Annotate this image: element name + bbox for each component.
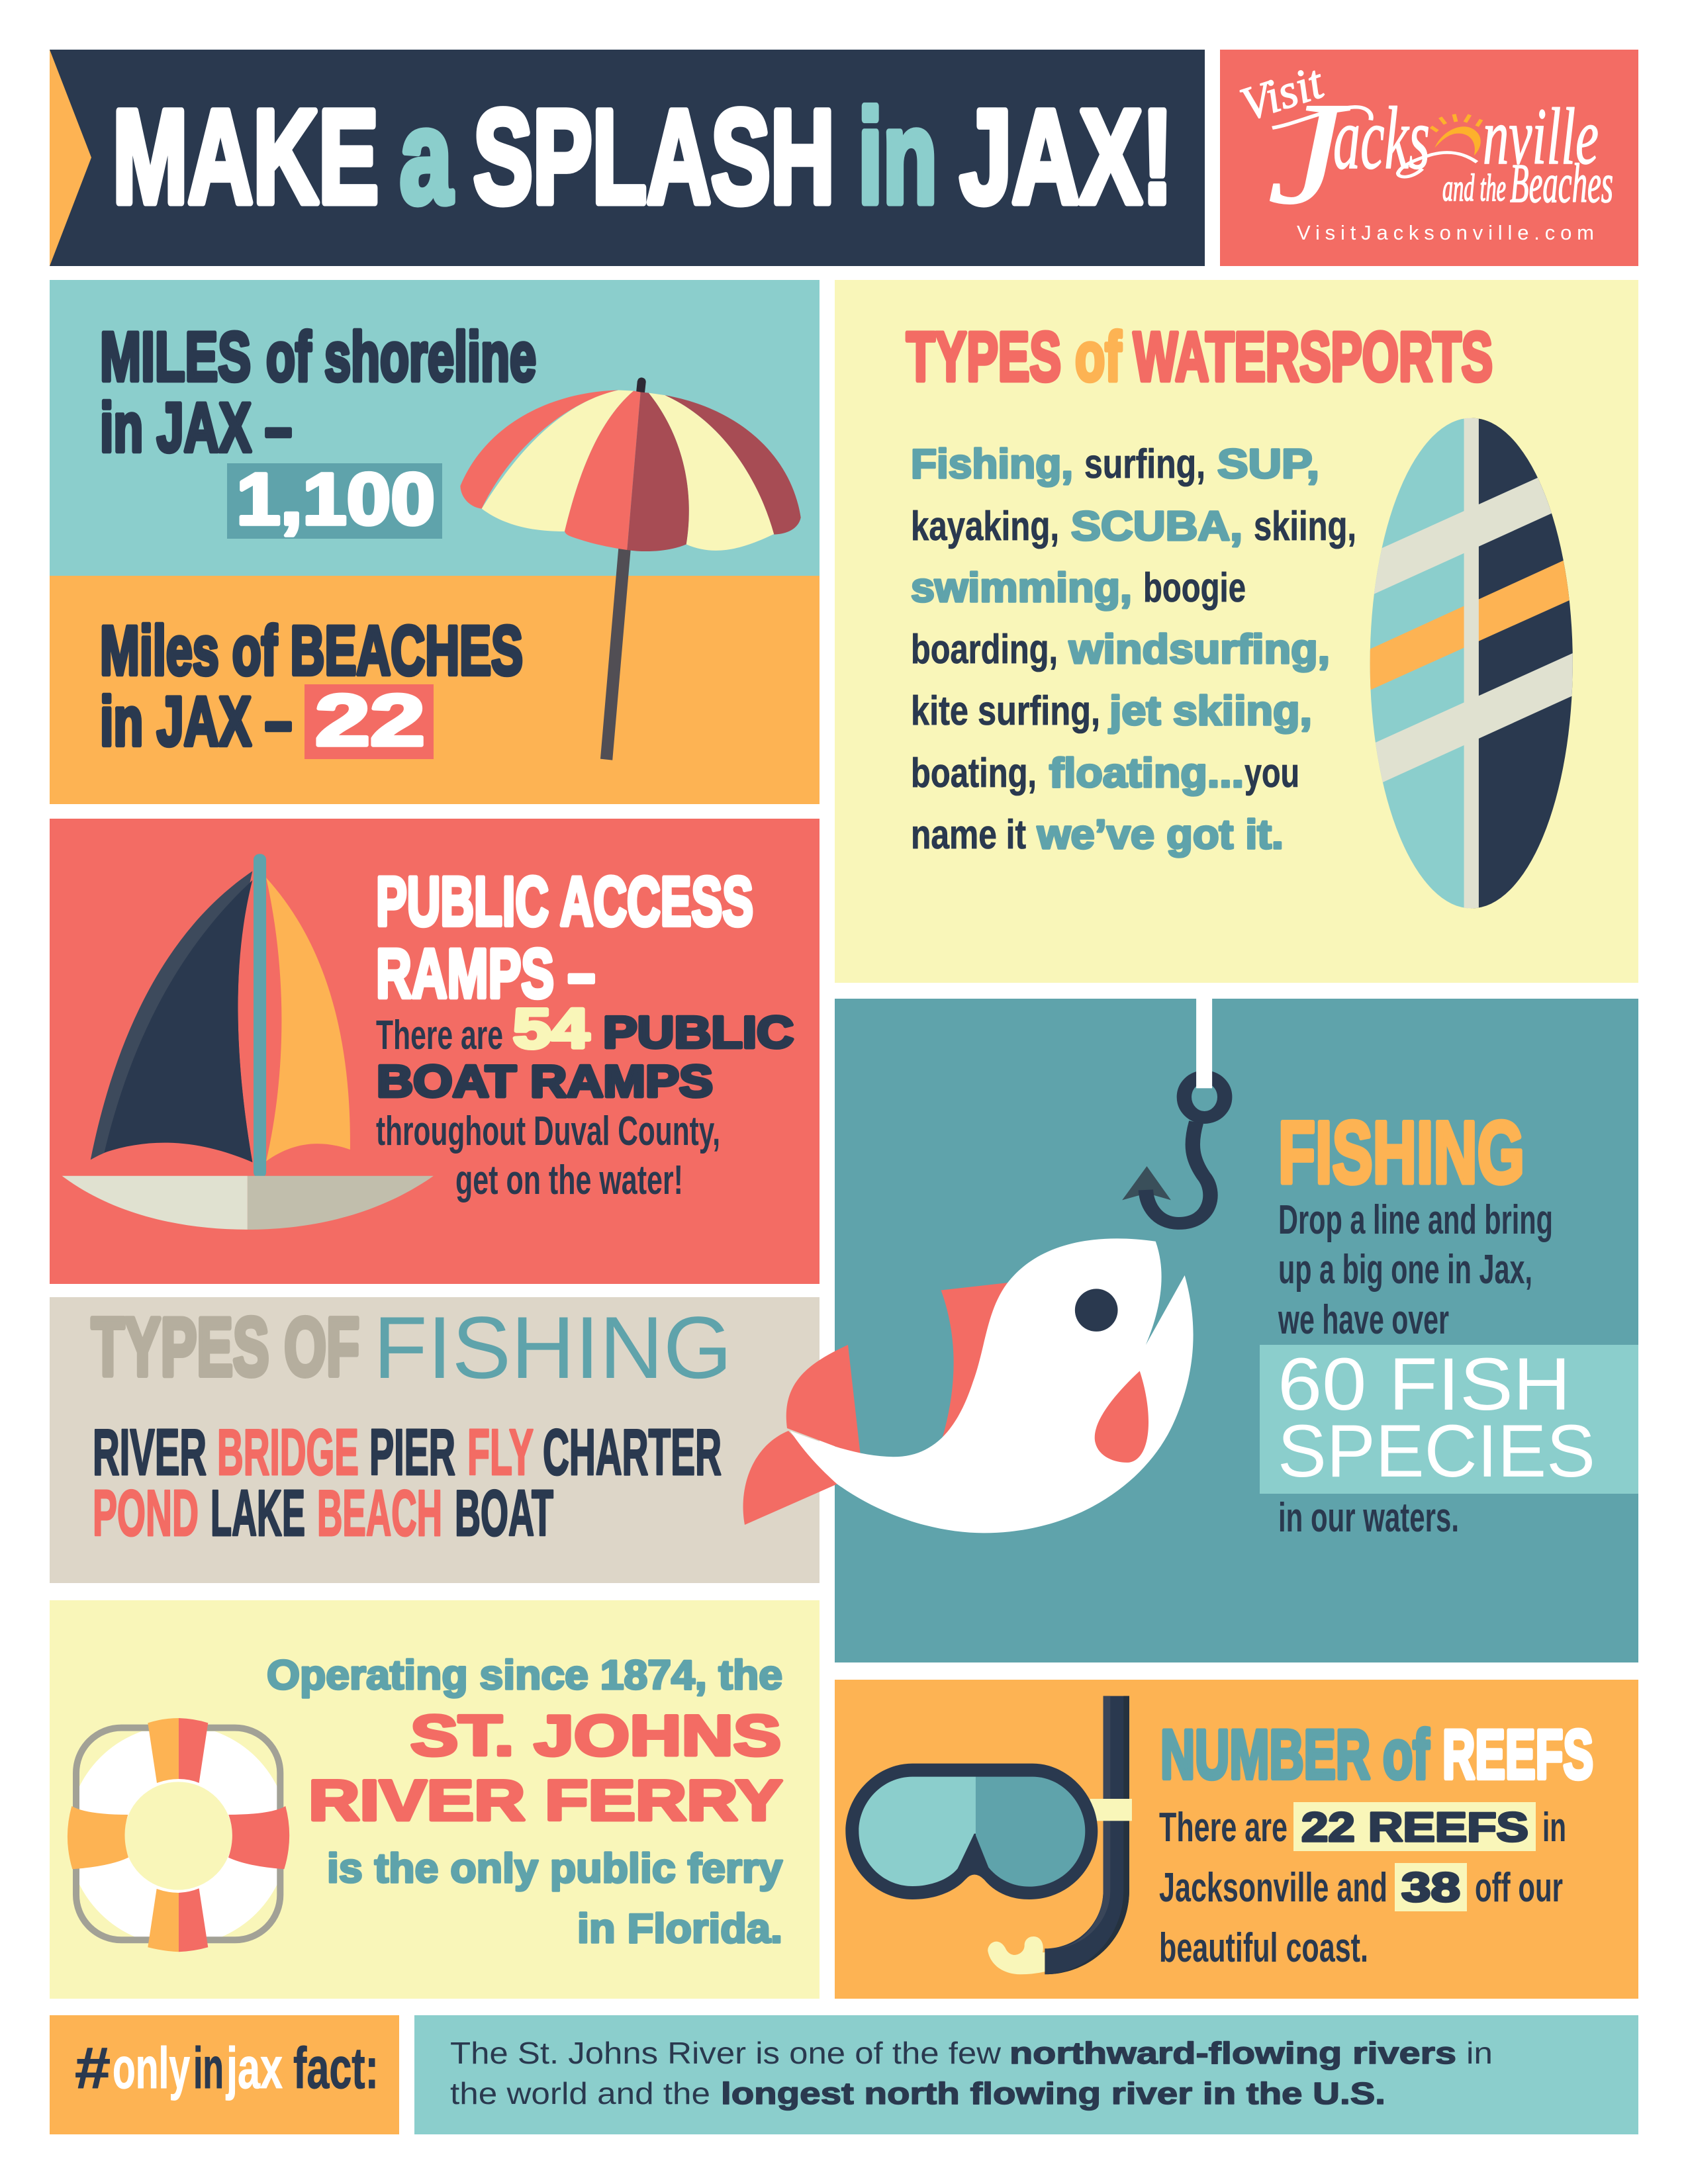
panel: types of watersports: WATERSPORTS (1133, 318, 1493, 396)
panel: onlyinjax label: in (193, 2035, 224, 2101)
panel: st johns river ferry: RIVER FERRY (308, 1769, 782, 1833)
panel: onlyinjax label (50, 2015, 399, 2134)
highlight: 22 reefs: 22 REEFS (1301, 1805, 1528, 1850)
title banner: MAKE (113, 82, 379, 231)
panel: st johns river ferry: ST. JOHNS (410, 1704, 781, 1768)
panel: onlyinjax label: only (113, 2035, 190, 2101)
callout: 60 fish species: SPECIES (1278, 1410, 1595, 1492)
callout: 60 fish species: 60 FISH (1278, 1343, 1571, 1426)
panel: fishing (835, 999, 1638, 1662)
panel: types of fishing: LAKE (211, 1477, 305, 1549)
watersports list: we’ve got it. (1037, 812, 1284, 858)
panel: st johns river ferry: in Florida. (577, 1906, 782, 1952)
watersports list: name it (911, 812, 1026, 858)
panel: public access ramps: PUBLIC ACCESS (376, 863, 753, 940)
panel: fishing: we have over (1278, 1297, 1449, 1343)
watersports list: you (1244, 751, 1299, 796)
watersports list: kayaking, (911, 504, 1059, 549)
panel: number of reefs: NUMBER (1160, 1716, 1370, 1794)
stat: 1,100: 1,100 (236, 459, 435, 540)
logo panel: and the (1442, 166, 1506, 209)
panel: public access ramps: throughout Duval County, (376, 1109, 720, 1154)
panel: fishing: up a big one in Jax, (1278, 1247, 1532, 1293)
icon: snorkel mask (845, 1696, 1132, 1974)
panel: types of watersports (835, 280, 1638, 983)
panel: types of fishing: FLY (467, 1416, 534, 1488)
panel: fishing: in our waters. (1278, 1495, 1459, 1541)
panel: onlyinjax label: fact: (293, 2035, 379, 2101)
panel: number of reefs: in (1542, 1805, 1566, 1850)
panel: fishing: Drop a line and bring (1278, 1197, 1553, 1243)
title banner (50, 50, 1205, 266)
icon: sailboat (62, 854, 434, 1230)
icon: beach umbrella (460, 377, 801, 760)
panel: types of fishing: TYPES OF (91, 1302, 359, 1393)
watersports list: windsurfing, (1068, 627, 1330, 672)
panel: st johns river ferry (50, 1600, 820, 1999)
panel: types of fishing: BRIDGE (217, 1416, 359, 1488)
title banner: in (858, 82, 937, 231)
watersports list: SCUBA, (1071, 504, 1243, 549)
panel: st johns river ferry: Operating since 1874, the (267, 1653, 782, 1698)
panel: types of fishing: BEACH (317, 1477, 442, 1549)
panel: miles of beaches: in JAX – (100, 683, 292, 760)
panel: miles of shoreline: MILES (100, 318, 251, 396)
panel: types of fishing: CHARTER (543, 1416, 722, 1488)
panel: public access ramps: 54 (513, 997, 589, 1060)
stat: 22 (305, 680, 434, 761)
callout: 60 fish species (1260, 1343, 1638, 1494)
watersports list (911, 441, 1356, 858)
panel: river fact: the world and the (450, 2076, 710, 2111)
logo panel (1220, 50, 1638, 266)
stat: 22: 22 (315, 680, 425, 761)
logo panel: Visit (1234, 55, 1331, 131)
panel: st johns river ferry: is the only public ferry (327, 1846, 783, 1891)
panel: public access ramps: PUBLIC (603, 1007, 794, 1058)
panel: onlyinjax label: jax (226, 2035, 283, 2101)
panel: types of fishing: RIVER (93, 1416, 207, 1488)
watersports list: Fishing, (911, 441, 1073, 487)
icon: fish (743, 1238, 1194, 1533)
watersports list: kite surfing, (911, 688, 1100, 734)
highlight: 38: 38 (1401, 1865, 1460, 1911)
panel: types of watersports: TYPES (906, 318, 1061, 396)
panel: types of fishing (50, 1297, 820, 1583)
panel: miles of shoreline: in JAX – (100, 389, 292, 467)
panel: types of fishing: PIER (369, 1416, 455, 1488)
logo panel: J (1268, 72, 1351, 235)
panel: number of reefs: There are (1159, 1805, 1288, 1850)
panel: river fact: The St. Johns River is one of the few (450, 2036, 1002, 2070)
watersports list: boarding, (911, 627, 1058, 672)
panel: number of reefs: REEFS (1442, 1716, 1593, 1794)
panel: onlyinjax label: # (75, 2035, 111, 2101)
panel: types of fishing: BOAT (455, 1477, 553, 1549)
panel: number of reefs: off our (1475, 1865, 1563, 1911)
icon: fishing hook (1122, 999, 1225, 1223)
watersports list: floating... (1049, 751, 1244, 796)
panel: number of reefs: Jacksonville and (1159, 1865, 1387, 1911)
logo panel: nville (1483, 92, 1599, 181)
title banner: JAX! (960, 82, 1173, 231)
panel: types of fishing: FISHING (373, 1299, 732, 1397)
panel: miles of beaches: Miles of BEACHES (100, 612, 523, 690)
watersports list: skiing, (1254, 504, 1356, 549)
panel: public access ramps: get on the water! (455, 1158, 683, 1203)
logo panel: VisitJacksonville.com (1297, 221, 1594, 244)
panel: types of fishing: POND (93, 1477, 199, 1549)
watersports list: jet skiing, (1109, 688, 1312, 734)
panel: miles of shoreline (50, 280, 820, 576)
icon: life ring (68, 1718, 289, 1952)
panel: river fact: longest north flowing river in the U.S. (721, 2076, 1385, 2111)
watersports list: boogie (1143, 565, 1246, 611)
logo panel: acks (1333, 89, 1430, 188)
title banner: a (400, 82, 453, 231)
panel: miles of beaches (50, 576, 820, 804)
panel: public access ramps: BOAT RAMPS (377, 1056, 713, 1107)
watersports list: boating, (911, 751, 1037, 796)
panel: public access ramps: There are (376, 1013, 503, 1058)
panel: miles of shoreline: of shoreline (266, 318, 536, 396)
panel: number of reefs: of (1383, 1716, 1430, 1794)
icon: surfboard (1370, 418, 1573, 909)
panel: fishing: FISHING (1278, 1104, 1524, 1202)
panel: number of reefs (835, 1680, 1638, 1999)
highlight: 38 (1395, 1863, 1467, 1911)
watersports list: swimming, (911, 565, 1132, 611)
panel: number of reefs: beautiful coast. (1159, 1925, 1368, 1971)
panel: river fact: in (1466, 2036, 1493, 2070)
panel: river fact: northward-flowing rivers (1009, 2036, 1456, 2070)
panel: types of watersports: of (1075, 318, 1122, 396)
title banner: SPLASH (473, 82, 835, 231)
panel: river fact (414, 2015, 1638, 2134)
panel: public access ramps (50, 819, 820, 1284)
watersports list: SUP, (1217, 441, 1319, 487)
watersports list: surfing, (1084, 441, 1205, 487)
icon: sun (1272, 107, 1481, 177)
panel: public access ramps: RAMPS – (376, 935, 595, 1013)
